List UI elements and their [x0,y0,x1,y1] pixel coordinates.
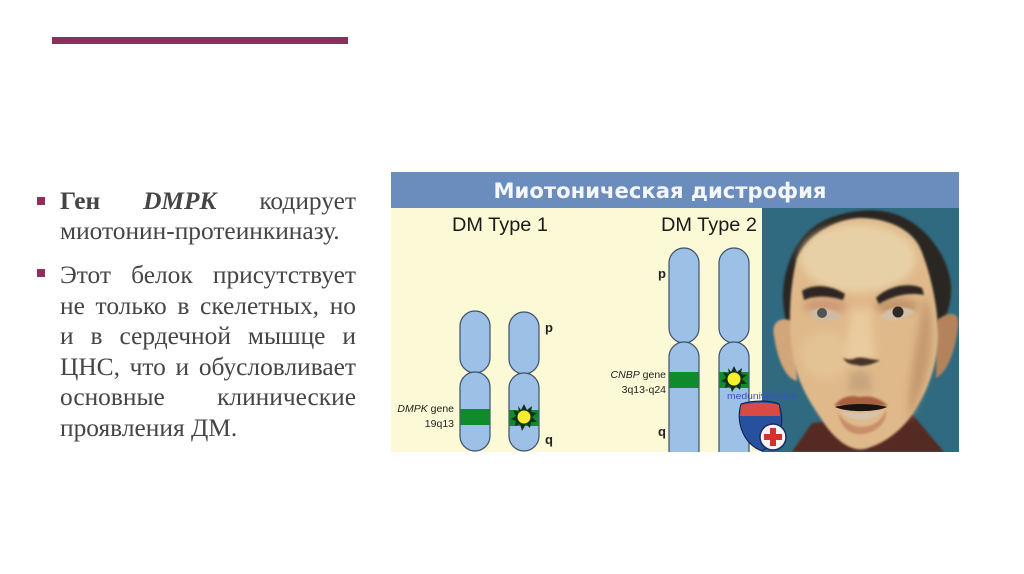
icon: mutation burst type 1 [511,404,537,431]
logo red cross [764,428,782,446]
label: p type 2: p [658,266,666,281]
figure background [391,208,763,452]
right eye socket [875,298,919,314]
right ear [936,314,958,378]
bullet marker 2 [37,269,45,277]
bullet 2 line 1: Этот белок присутствует [60,260,356,288]
right eye [880,308,915,320]
logo shield [739,401,782,451]
label: DMPK gene: DMPK gene [397,403,454,415]
heading: DM Type 1: DM Type 1 [452,215,548,236]
bullet 1 line 2: миотонин-протеинкиназу. [60,217,340,245]
bullet 2 line 2: не только в скелетных, но [60,292,356,320]
left ear [774,319,797,381]
bullet 2 line 3: и в сердечной мышце и [60,322,356,350]
bullet marker 1 [37,197,45,205]
icon: mutation burst type 2 [721,366,747,392]
face [790,218,938,449]
bullet 2 line 4: ЦНС, что и обусловливает [60,352,356,380]
pale forehead highlight [800,224,916,292]
top accent bar [52,37,348,44]
photo backdrop [762,208,959,452]
label: 19q13: 19q13 [425,418,454,430]
cheek highlight left [804,334,844,376]
chromosome: type 2 normal [669,248,699,467]
watermark: meduniver logo [727,391,797,451]
right eyebrow [876,285,924,304]
heading: DM Type 2: DM Type 2 [661,215,757,236]
chromosome: type 1 normal [460,311,490,451]
label: q type 1: q [545,432,553,447]
figure: myotonic dystrophy chromosomes and patient photo [391,172,959,452]
patient photo [762,208,959,452]
bullet 2 line 6: проявления ДМ. [60,414,237,442]
label: p type 1: p [545,320,553,335]
icon: mutation core type 1 [518,410,530,424]
jacket and collar [792,415,944,452]
mouth opening [835,404,887,411]
text block: bullet points [37,186,356,442]
icon: mutation core type 2 [728,372,740,386]
left eye socket [803,298,847,314]
chromosome: type 1 mutated [509,312,539,451]
lower lip [838,410,886,434]
logo red stripe [740,403,780,416]
label: CNBP gene: CNBP gene [611,369,666,381]
upper lip [834,396,888,406]
left eye [808,308,843,321]
figure header band [391,172,959,208]
label: q type 2: q [658,424,666,439]
left iris [817,308,827,318]
logo circle [760,424,786,450]
right iris [892,306,904,318]
watermark text: meduniver.com [727,391,797,401]
nose [845,310,876,364]
hair [783,210,951,335]
bullet 1 line 1: Ген DMPK кодирует [60,186,356,214]
bullet 2 line 5: основные клинические [60,383,356,411]
left eyebrow [802,286,845,300]
label: 3q13-q24: 3q13-q24 [622,384,666,396]
chromosome: type 2 mutated [719,248,749,467]
nostrils [843,357,880,366]
teeth [841,410,883,420]
mustache shadow [848,371,872,392]
figure title: Миотоническая дистрофия [494,179,826,203]
cheek shading right [908,295,932,420]
